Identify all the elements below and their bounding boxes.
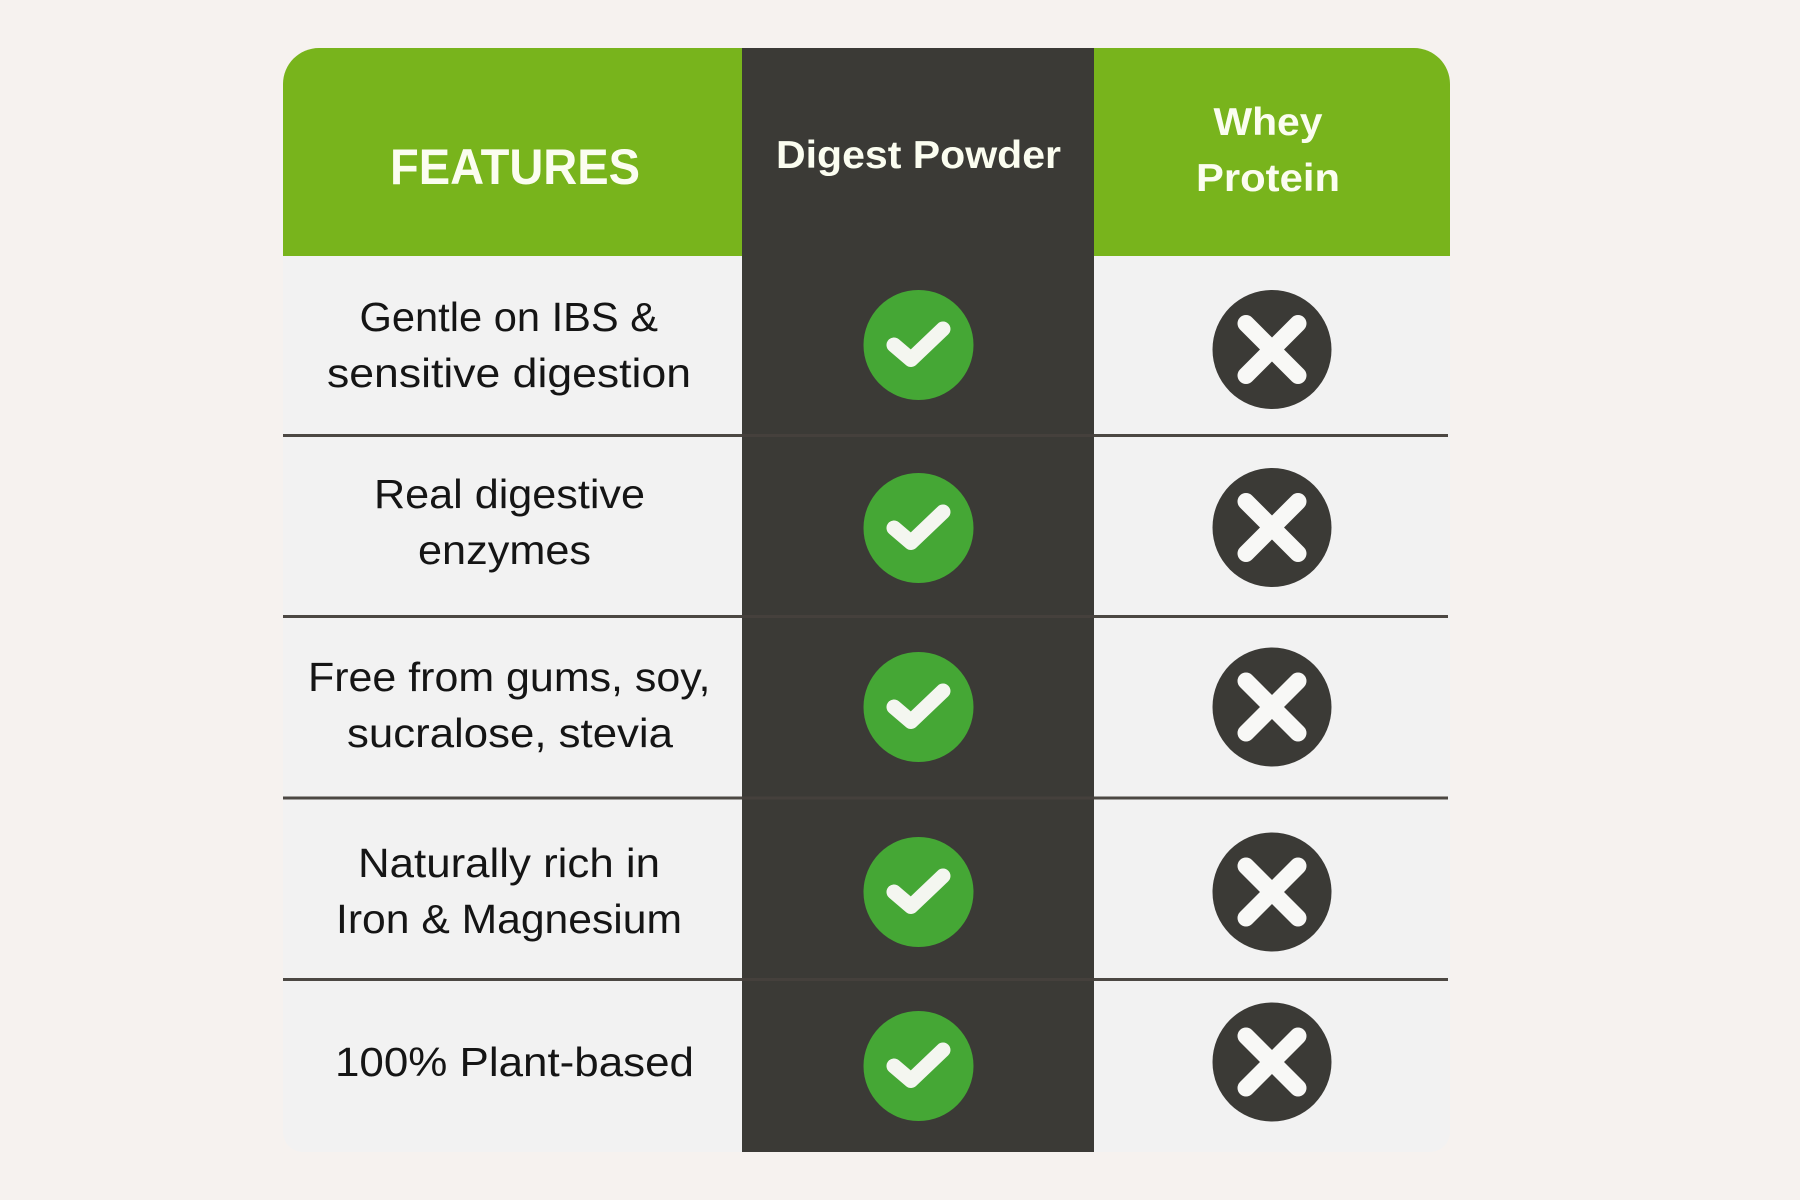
feature: Free from gums: Free from gums, soy, xyxy=(308,654,710,700)
faint dividers across the dark column xyxy=(742,434,1094,981)
icon: check row 5 xyxy=(864,1011,974,1121)
icon: cross row 5 xyxy=(1212,1002,1332,1122)
feature: Free from gums xyxy=(308,654,710,756)
icon: check row 1 xyxy=(864,290,974,400)
icon: check row 2 xyxy=(864,473,974,583)
icon: check row 4 xyxy=(864,837,974,947)
heading: Digest Powder: Digest Powder xyxy=(776,134,1061,177)
panel: table body xyxy=(283,255,1450,1152)
feature: Gentle on IBS: Gentle on IBS & xyxy=(360,294,658,340)
icon: cross row 3 xyxy=(1212,648,1332,766)
feature: Naturally rich xyxy=(336,840,682,942)
feature: Gentle on IBS: sensitive digestion xyxy=(327,350,691,396)
icon: cross row 4 xyxy=(1212,832,1332,952)
heading: Whey Protein xyxy=(1196,101,1340,200)
heading: Whey Protein: Protein xyxy=(1196,157,1340,200)
feature: Gentle on IBS xyxy=(327,294,691,396)
icon: cross row 2 xyxy=(1212,468,1332,587)
feature: Naturally rich: Iron & Magnesium xyxy=(336,896,682,942)
feature: Real digestive enzymes: enzymes xyxy=(418,527,591,573)
heading: Whey Protein: Whey xyxy=(1214,101,1323,144)
row dividers xyxy=(283,434,1448,981)
feature: Real digestive enzymes: Real digestive xyxy=(374,471,645,517)
icon: cross row 1 xyxy=(1212,290,1332,409)
panel: Digest Powder column xyxy=(742,48,1094,1152)
heading: FEATURES: FEATURES xyxy=(390,139,640,195)
feature: Real digestive enzymes xyxy=(374,471,645,573)
feature: Naturally rich: Naturally rich in xyxy=(358,840,660,886)
icon: check row 3 xyxy=(864,652,974,762)
feature: 100% Plant-based: 100% Plant-based xyxy=(335,1039,694,1085)
feature: Free from gums: sucralose, stevia xyxy=(347,710,673,756)
panel: green header xyxy=(283,48,1450,256)
